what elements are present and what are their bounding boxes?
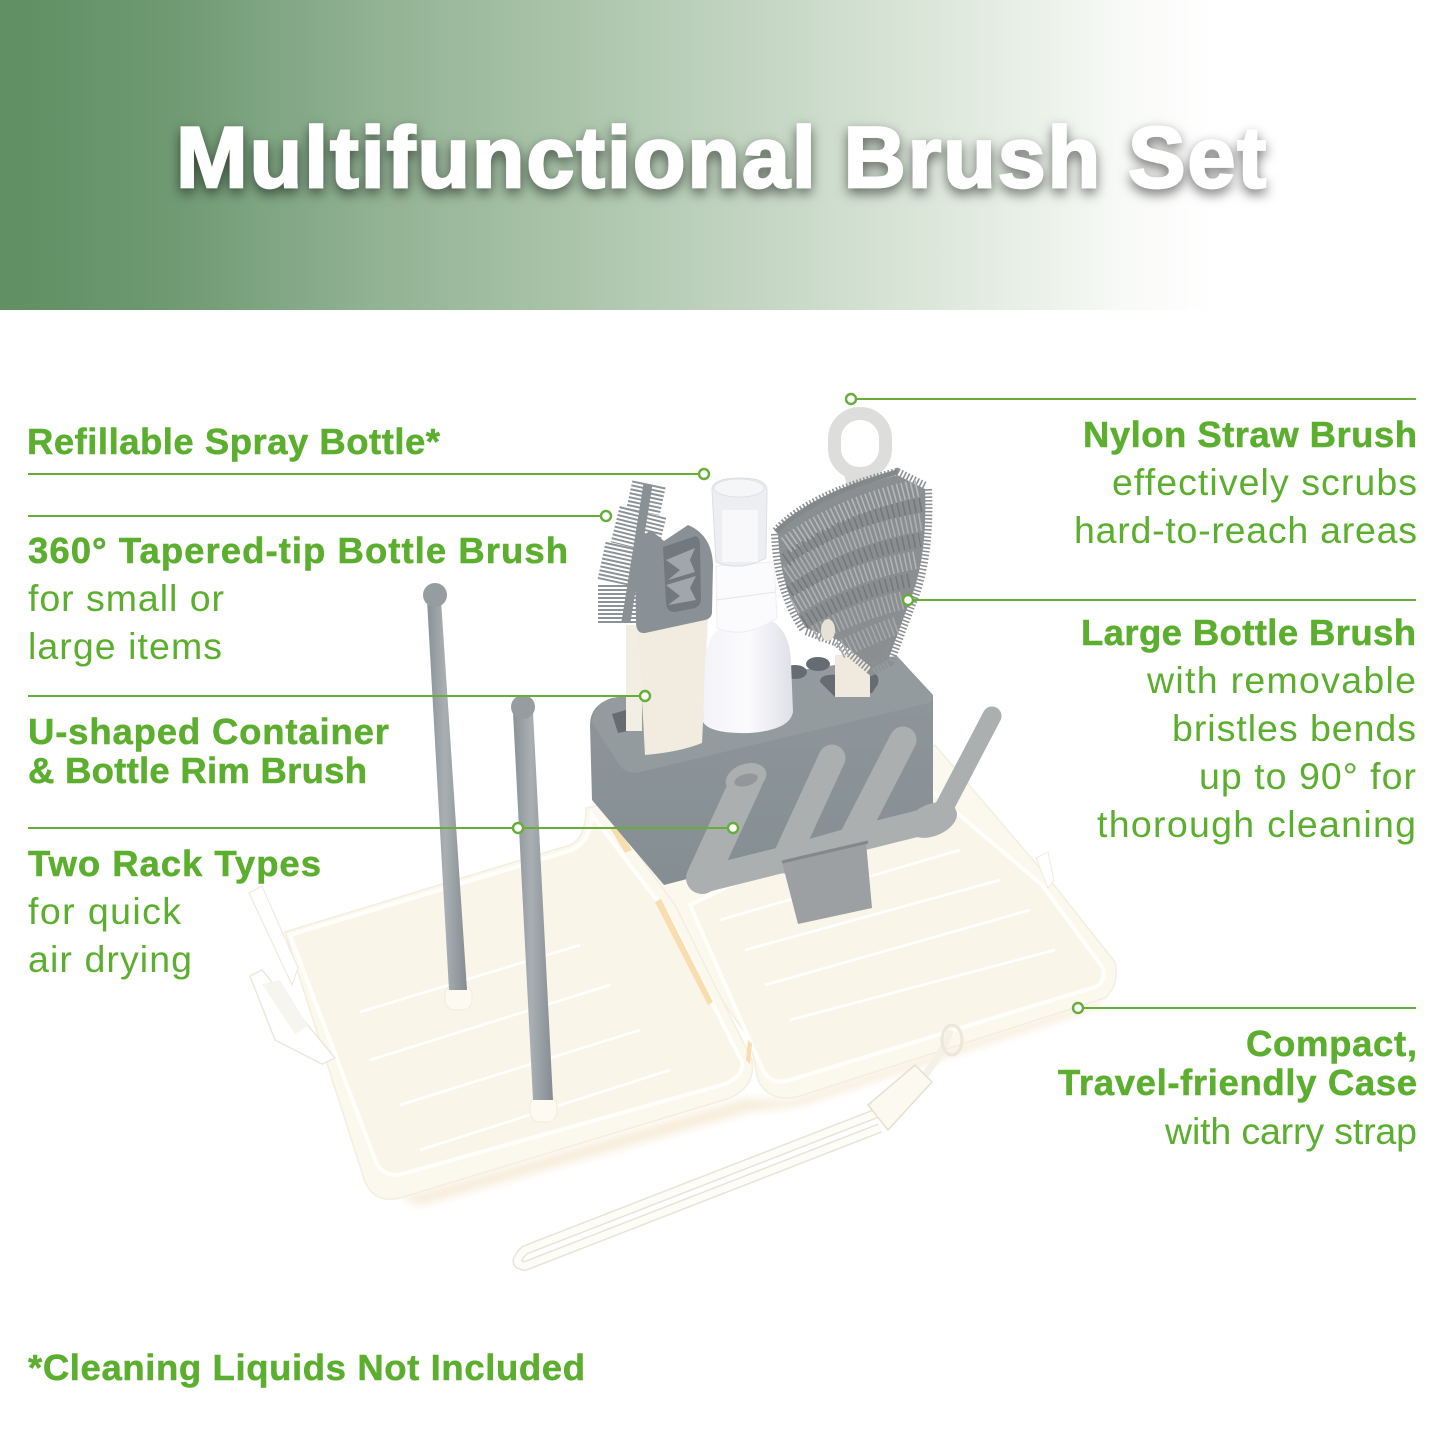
callout: nylon straw brush: effectively scrubs	[1112, 461, 1417, 503]
orange hinge marks	[655, 899, 713, 1005]
callout: refillable spray bottle	[27, 421, 709, 479]
callout: two rack types: Two Rack Types	[28, 843, 321, 884]
callout: large bottle brush: Large Bottle Brush	[1081, 612, 1416, 653]
callout: nylon straw brush: Nylon Straw Brush	[1083, 414, 1417, 455]
callout: tapered-tip bottle brush: large items	[28, 625, 222, 667]
callout: u-shaped container brush	[28, 691, 650, 791]
callout: travel case: with carry strap	[1164, 1110, 1417, 1152]
footnote: *Cleaning Liquids Not Included	[28, 1347, 585, 1388]
callout: large bottle brush: bristles bends	[1172, 707, 1416, 749]
callout: tapered-tip bottle brush	[28, 511, 611, 667]
callout: large bottle brush: with removable	[1146, 659, 1416, 701]
callout: nylon straw brush	[846, 394, 1417, 551]
header banner	[0, 0, 1445, 310]
title: Multifunctional Brush Set	[176, 110, 1266, 206]
callout: large bottle brush	[903, 595, 1416, 845]
callout: tapered-tip bottle brush: for small or	[28, 577, 224, 619]
spray bottle	[703, 478, 793, 733]
product illustration	[249, 414, 1116, 1266]
callout: two rack types: for quick	[28, 890, 181, 932]
case tabs	[249, 886, 298, 985]
large bottle brush	[776, 414, 925, 697]
callout: large bottle brush: thorough cleaning	[1097, 803, 1416, 845]
callout: u-shaped container brush: U-shaped Container	[28, 711, 389, 752]
callout: u-shaped container brush: & Bottle Rim Brush	[28, 750, 367, 791]
callout: travel case	[1058, 1003, 1417, 1152]
carry strap	[518, 1025, 962, 1266]
callout: tapered-tip bottle brush: 360° Tapered-tip Bottle Brush	[28, 530, 568, 571]
drying rack	[702, 716, 992, 924]
left case tray	[249, 805, 753, 1199]
right case tray	[590, 745, 1116, 1098]
callout: travel case: Travel-friendly Case	[1058, 1062, 1417, 1103]
case shadow	[400, 998, 1105, 1206]
U-shaped container / holder	[590, 656, 933, 885]
callout: large bottle brush: up to 90° for	[1199, 755, 1416, 797]
small bottle brush	[626, 484, 649, 731]
callout: nylon straw brush: hard-to-reach areas	[1074, 509, 1417, 551]
rim brush	[635, 525, 713, 755]
callout: two rack types	[28, 823, 738, 980]
two upright rods	[423, 583, 557, 1122]
callout: two rack types: air drying	[28, 938, 192, 980]
callout: travel case: Compact,	[1246, 1023, 1417, 1064]
callout: refillable spray bottle: Refillable Spray Bottle*	[27, 421, 441, 462]
